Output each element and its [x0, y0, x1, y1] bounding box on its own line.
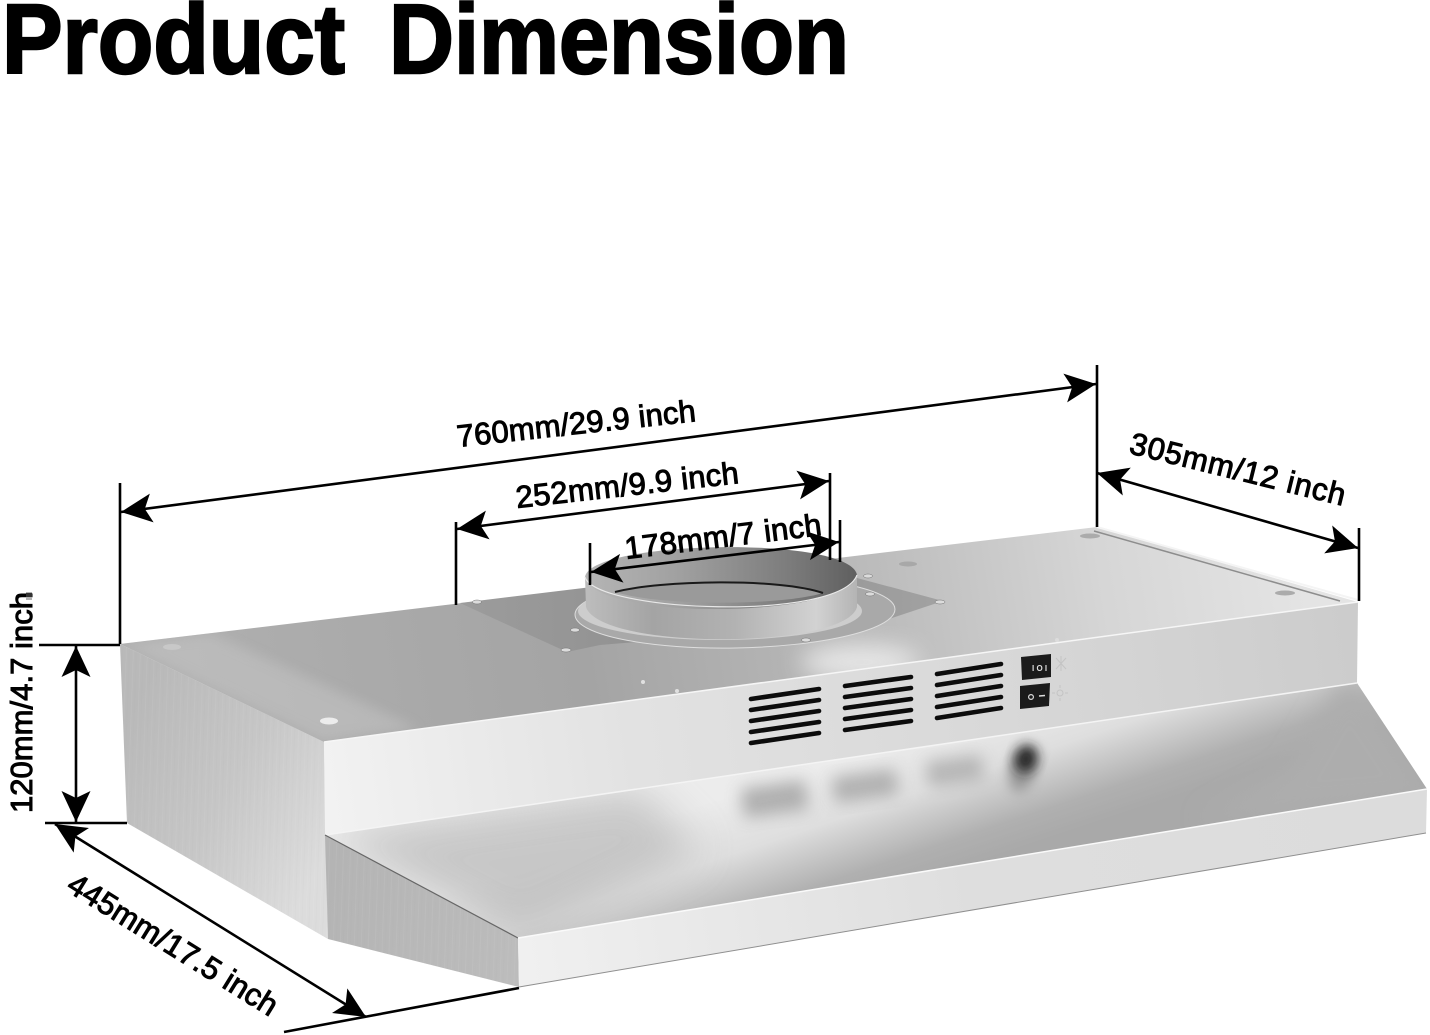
dimension: overall depth	[55, 824, 519, 1032]
mounting holes on top face	[163, 534, 1295, 724]
light switch	[1020, 683, 1050, 709]
front fascia	[324, 602, 1358, 835]
visor side panel	[325, 835, 519, 987]
dimension: height	[4, 592, 127, 823]
duct collar	[578, 547, 862, 640]
dimension: plate width: 252mm/9.9 inch	[514, 455, 740, 515]
dimension: plate width	[456, 455, 830, 605]
left side panel	[120, 644, 328, 939]
title	[2, 0, 849, 94]
visor front lip	[518, 789, 1427, 987]
dimension: top depth: 305mm/12 inch	[1126, 426, 1349, 513]
fan speed switch: I O I	[1032, 664, 1047, 673]
dimension: height: 120mm/4.7 inch	[4, 592, 39, 813]
fan speed switch	[1021, 654, 1051, 680]
dimension: duct diameter: 178mm/7 inch	[623, 507, 823, 566]
visor top surface	[325, 683, 1427, 938]
dimension: overall width: 760mm/29.9 inch	[455, 393, 697, 454]
switch symbols	[1052, 656, 1068, 701]
plate screws	[472, 574, 945, 652]
range hood product drawing	[120, 527, 1427, 987]
duct mounting plate	[460, 578, 943, 652]
dimension: overall depth: 445mm/17.5 inch	[61, 866, 285, 1023]
dimension: duct diameter	[590, 507, 840, 585]
vent and switch reflections	[740, 742, 1041, 818]
plate flange	[574, 573, 896, 651]
vent right	[937, 664, 1001, 718]
top face	[120, 527, 1358, 742]
vent centre	[845, 677, 911, 730]
vent left	[751, 689, 819, 743]
dimension: top depth	[1097, 426, 1359, 601]
dimension: overall width	[120, 365, 1097, 644]
